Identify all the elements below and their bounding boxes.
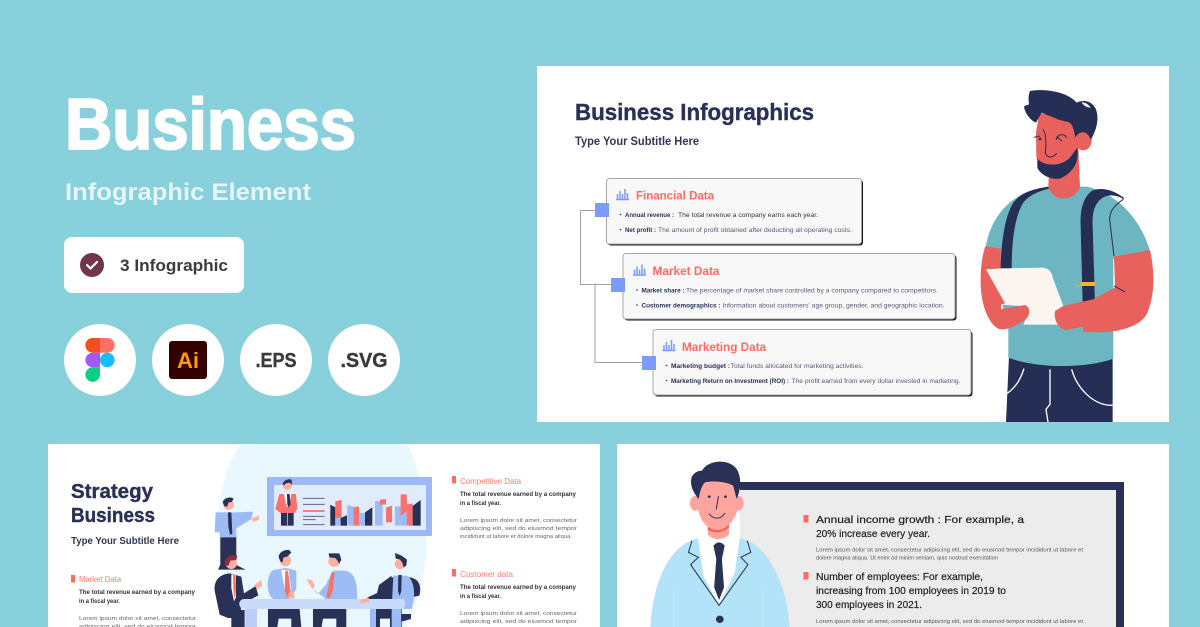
panel: Business Infographics xyxy=(537,66,1169,422)
panel subtitle: Type Your Subtitle Here xyxy=(71,535,179,547)
card: Financial Data: Financial Data xyxy=(636,190,715,202)
table xyxy=(239,599,396,627)
card: Market Data: Market share : xyxy=(642,288,684,294)
heading: Strategy xyxy=(71,481,154,503)
text block: Market Data: in a fiscal year. xyxy=(79,598,120,605)
text block: Customer data: Lorem ipsum dolor sit amet, consectetur xyxy=(460,611,577,617)
card: Market Data: Market Data xyxy=(652,266,720,278)
card: Marketing Data: The profit earned from every dollar invested in marketing. xyxy=(792,379,961,385)
text block: Competitive Data: Competitive Data xyxy=(460,477,522,486)
text block: Competitive Data: adipiscing elit, sed do eiusmod tempor xyxy=(460,526,577,532)
text block: Annual income growth: Lorem ipsum dolor sit amet, consectetur adipiscing elit, sed do eiusmod tempor incididunt ut labore et xyxy=(816,548,1084,554)
text block: Number of employees xyxy=(804,571,1084,627)
icon: Figma xyxy=(64,324,136,396)
card: Financial Data: The total revenue a company earns each year. xyxy=(678,213,818,219)
panel: Strategy Business xyxy=(48,444,600,627)
text block: Number of employees: Number of employees: For example, xyxy=(816,571,983,583)
panel subtitle: Type Your Subtitle Here xyxy=(575,134,699,148)
illustration: meeting group xyxy=(215,497,396,627)
card: Market Data: Information about customers' age group, gender, and geographic location. xyxy=(722,304,945,310)
text block: Customer data: adipiscing elit, sed do eiusmod tempor xyxy=(460,619,577,625)
illustration: person on the right xyxy=(360,553,420,627)
text block: Number of employees: 300 employees in 2021. xyxy=(816,599,922,611)
text block: Market Data: Lorem ipsum dolor sit amet, consectetur xyxy=(79,616,196,622)
text block: Competitive Data: incididunt ut labore et dolore magna aliqua. xyxy=(460,534,572,540)
icon: SVG: .SVG xyxy=(340,350,388,372)
card: Marketing Data: Total funds allocated for marketing activities. xyxy=(730,364,864,370)
card: Financial Data: The amount of profit obtained after deducting all operating costs. xyxy=(658,228,852,234)
icon: Adobe Illustrator xyxy=(152,324,224,396)
seated person left xyxy=(215,555,262,627)
main title: Business xyxy=(65,85,356,165)
background blob xyxy=(218,444,427,627)
card: Marketing Data: Marketing budget : xyxy=(671,364,730,370)
text block: Competitive Data: in a fiscal year. xyxy=(460,500,501,507)
frame xyxy=(740,482,1124,627)
text block: Market Data xyxy=(71,575,196,627)
text block: Market Data: Market Data xyxy=(79,575,122,584)
connector lines xyxy=(580,210,643,362)
icon: Adobe Illustrator: Ai xyxy=(177,348,199,373)
icon: EPS: .EPS xyxy=(256,350,296,372)
card: Marketing Data: Marketing Return on Investment (ROI) : xyxy=(671,379,789,385)
text block: Competitive Data: Lorem ipsum dolor sit amet, consectetur xyxy=(460,518,577,524)
illustration: man with paper xyxy=(981,90,1153,422)
panel: company growth xyxy=(617,444,1169,627)
heading: Business xyxy=(71,505,155,527)
text block: Market Data: The total revenue earned by a company xyxy=(79,589,195,596)
badge: 3 Infographic xyxy=(64,237,244,293)
card: Market Data: The percentage of market share controlled by a company compared to competitors. xyxy=(686,288,938,294)
icon: EPS xyxy=(240,324,312,396)
text block: Competitive Data: The total revenue earned by a company xyxy=(460,491,576,498)
text block: Annual income growth: dolore magna aliqua. Ut enim ad minim veniam, quis nostrud exercitation xyxy=(816,556,998,562)
person centre right xyxy=(306,553,357,627)
card: Financial Data: Annual revenue : xyxy=(625,213,674,219)
person centre left xyxy=(268,550,301,627)
card: Financial Data xyxy=(595,178,863,246)
text block: Annual income growth: Annual income growth : For example, a xyxy=(816,514,1024,526)
presenter xyxy=(215,497,259,570)
card: Marketing Data: Marketing Data xyxy=(682,342,767,354)
text block: Competitive Data xyxy=(452,476,577,540)
heading: Business Infographics xyxy=(575,99,814,125)
subtitle: Infographic Element xyxy=(65,179,311,206)
text block: Customer data xyxy=(452,569,577,627)
icon: SVG xyxy=(328,324,400,396)
text block: Customer data: The total revenue earned by a company xyxy=(460,584,576,591)
card: Market Data: Customer demographics : xyxy=(642,304,720,310)
text block: Customer data: Customer data xyxy=(460,570,514,579)
card: Marketing Data xyxy=(642,330,972,396)
text block: Number of employees: Lorem ipsum dolor sit amet, consectetur adipiscing elit, sed do eiusmod tempor incididunt ut labore et xyxy=(816,619,1084,625)
text block: Annual income growth: 20% increase every year. xyxy=(816,528,930,540)
card: Market Data xyxy=(611,254,956,320)
badge: 3 Infographic: 3 Infographic xyxy=(120,256,228,275)
presentation board with bar chart xyxy=(267,477,432,536)
illustration: man in suit xyxy=(650,462,789,627)
text block: Customer data: in a fiscal year. xyxy=(460,593,501,600)
text block: Annual income growth xyxy=(804,514,1084,562)
heading xyxy=(71,481,155,527)
card: Financial Data: Net profit : xyxy=(625,228,656,234)
text block: Number of employees: increasing from 100 employees in 2019 to xyxy=(816,585,1006,597)
